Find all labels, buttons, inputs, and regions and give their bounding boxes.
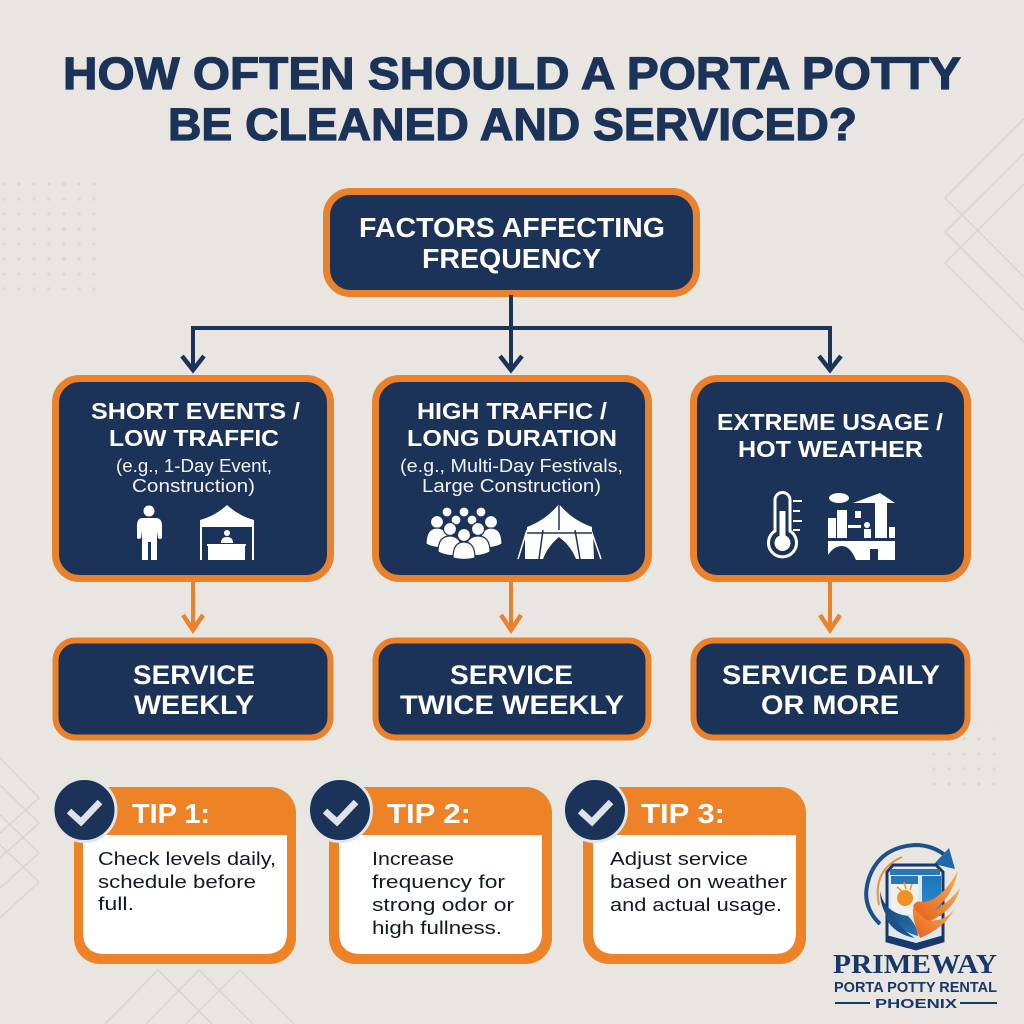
panel: service twice weekly: SERVICE [450,660,573,690]
icon: person [137,506,162,560]
panel: tip 1 [53,778,296,964]
icon: check badge [308,778,372,842]
panel: service weekly: WEEKLY [134,690,254,720]
panel: service daily or more: SERVICE DAILY [722,660,940,690]
icon: check badge [53,778,116,842]
panel: short events / low traffic [56,378,330,578]
icon: festival tent [518,504,601,559]
title: HOW OFTEN SHOULD A PORTA POTTY [63,48,961,99]
panel: extreme usage / hot weather [694,378,968,578]
panel: high traffic / long duration: HIGH TRAFFIC / [417,398,608,424]
icon: check badge [564,778,626,842]
icon: portable toilet [886,865,944,950]
logo: primeway [833,845,997,1011]
arrows: factors to categories [182,295,841,370]
panel: service daily or more: OR MORE [761,690,899,720]
icon: construction site [828,493,895,560]
panel: tip 2: TIP 2: [387,798,471,829]
icon: phoenix wings [880,871,960,938]
icon: thermometer [769,493,802,557]
panel: high traffic / long duration: (e.g., Multi-Day Festivals, [400,456,623,476]
panel: service daily or more [694,640,968,738]
panel: high traffic / long duration: Large Construction) [422,476,601,496]
panel: high traffic / long duration: LONG DURATION [407,425,617,451]
panel: tip 2: strong odor or [372,895,514,915]
icon: event tent with desk [200,505,254,560]
panel: high traffic / long duration [376,378,648,578]
panel: tip 3: based on weather [610,872,787,892]
panel: tip 1: full. [98,894,134,914]
title: BE CLEANED AND SERVICED? [168,99,857,150]
panel: tip 3: and actual usage. [610,895,782,915]
panel: service weekly [56,640,330,738]
panel: tip 3 [564,778,806,964]
panel: tip 3: Adjust service [610,849,748,869]
panel: tip 2 [308,778,552,964]
panel: service twice weekly: TWICE WEEKLY [400,690,624,720]
panel: extreme usage / hot weather: HOT WEATHER [738,436,923,462]
panel: tip 1: schedule before [98,872,256,892]
panel: factors affecting frequency [326,192,696,294]
panel: short events / low traffic: LOW TRAFFIC [109,425,279,451]
panel: tip 3: TIP 3: [641,798,725,829]
panel: service twice weekly [376,640,648,738]
panel: factors affecting frequency: FACTORS AFFECTING [359,212,665,243]
arrows: categories to service [183,581,840,630]
logo: primeway: PRIMEWAY [833,949,997,979]
panel: extreme usage / hot weather: EXTREME USAGE / [717,409,944,435]
logo: primeway: PHOENIX [875,996,957,1011]
panel: short events / low traffic: (e.g., 1-Day Event, [116,456,272,476]
panel: tip 2: Increase [372,849,454,869]
panel: short events / low traffic: Construction) [132,476,255,496]
panel: tip 1: Check levels daily, [98,849,276,869]
icon: circular arrow [866,845,955,924]
panel: tip 1: TIP 1: [132,798,210,829]
title [63,48,961,150]
panel: factors affecting frequency: FREQUENCY [422,243,601,274]
logo: primeway: PORTA POTTY RENTAL [834,979,997,996]
icon: crowd [426,507,502,560]
panel: tip 2: frequency for [372,872,505,892]
panel: service weekly: SERVICE [133,660,255,690]
panel: short events / low traffic: SHORT EVENTS / [91,398,301,424]
panel: tip 2: high fullness. [372,918,502,938]
